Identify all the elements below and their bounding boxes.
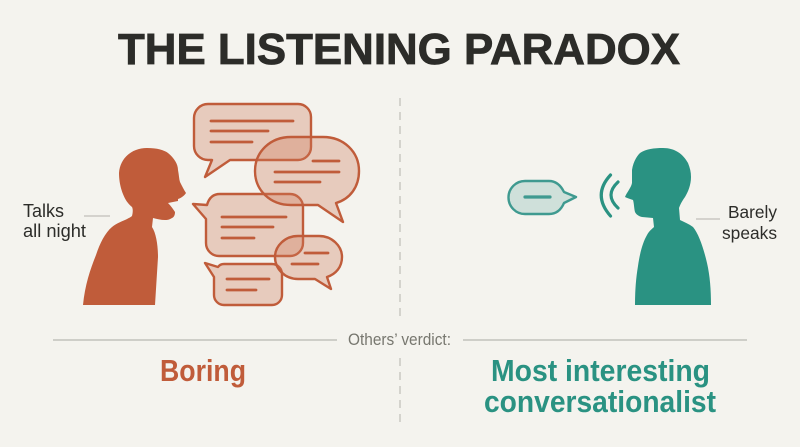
verdict: most interesting conversationalist: conversationalist [484, 385, 716, 419]
label: talks all night [23, 201, 110, 241]
label: barely speaks: speaks [722, 223, 777, 243]
panel: talker figure [83, 148, 186, 305]
small teal speech bubble [508, 181, 576, 214]
verdict: most interesting conversationalist [484, 354, 716, 419]
label: barely speaks: Barely [728, 202, 777, 222]
verdict label: Others’ verdict: [348, 331, 451, 349]
bubble 3 [193, 194, 303, 256]
bubble 2 [255, 137, 359, 222]
bubble 1 [194, 104, 311, 177]
label: talks all night: all night [23, 221, 86, 241]
bubble 5 [205, 263, 282, 305]
title: THE LISTENING PARADOX [118, 25, 680, 74]
verdict: boring: Boring [160, 354, 246, 388]
label: barely speaks [696, 202, 777, 243]
icon: sound waves [601, 175, 618, 216]
speech bubbles: many [193, 104, 359, 305]
bubble 4 [275, 236, 342, 289]
panel: listener figure [625, 148, 711, 305]
verdict: most interesting conversationalist: Most interesting [491, 354, 710, 388]
bubble text lines [211, 121, 339, 290]
label: talks all night: Talks [23, 201, 64, 221]
